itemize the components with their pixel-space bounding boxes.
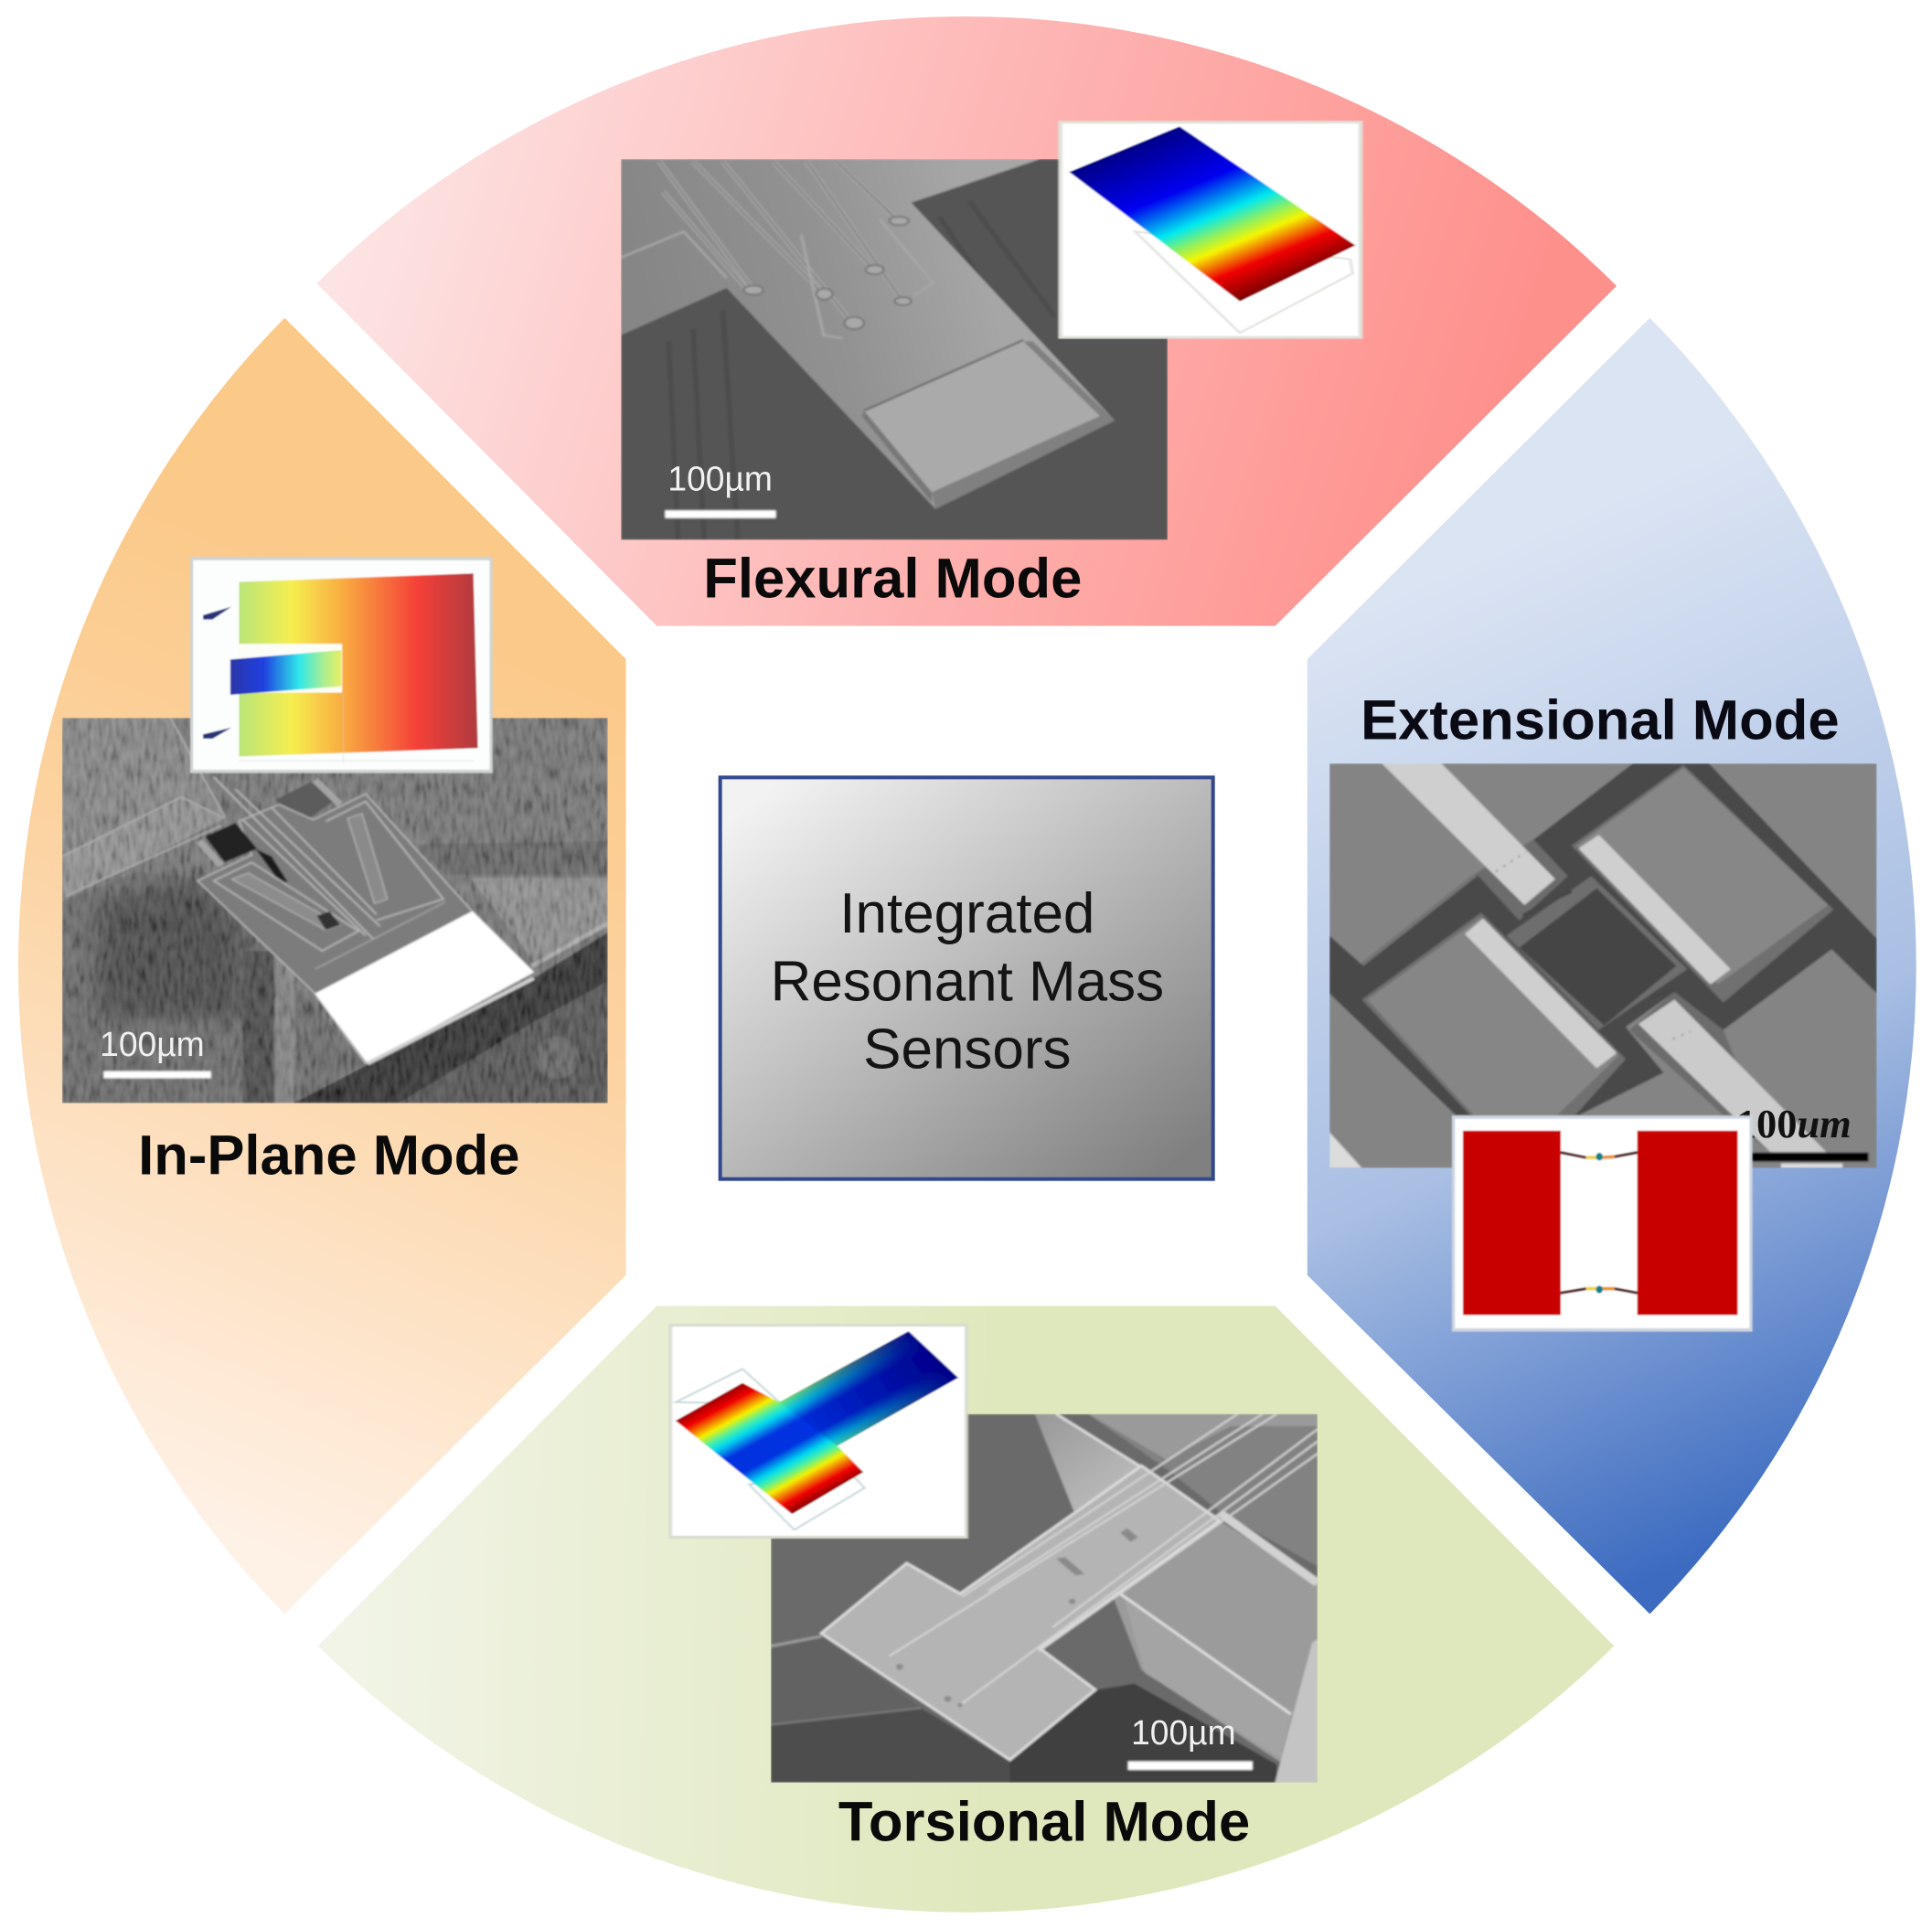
torsional scale label: 100µm xyxy=(1131,1713,1236,1752)
torsional label: Torsional Mode xyxy=(838,1790,1250,1853)
center title: Resonant Mass xyxy=(771,950,1164,1013)
flexural simulation inset xyxy=(1061,123,1361,337)
center title: Sensors xyxy=(863,1018,1072,1081)
in-plane label: In-Plane Mode xyxy=(138,1124,520,1187)
center title: Integrated xyxy=(839,882,1094,945)
panel: torsional mode xyxy=(318,1306,1614,1913)
center box xyxy=(720,777,1213,1179)
torsional SEM micrograph xyxy=(771,1414,1318,1783)
in-plane SEM micrograph xyxy=(62,718,608,1103)
in-plane simulation inset xyxy=(192,559,491,772)
extensional petal xyxy=(1308,318,1916,1614)
center panel xyxy=(720,777,1213,1179)
flexural scale label: 100µm xyxy=(667,459,773,497)
in-plane scale label: 100µm xyxy=(100,1025,205,1063)
extensional label: Extensional Mode xyxy=(1361,689,1840,752)
extensional SEM micrograph xyxy=(1329,763,1877,1168)
extensional simulation inset xyxy=(1454,1117,1751,1330)
torsional petal xyxy=(318,1306,1614,1913)
flexural SEM micrograph xyxy=(621,159,1168,540)
flexural petal xyxy=(316,16,1617,626)
panel: in-plane mode xyxy=(18,318,626,1614)
torsional simulation inset xyxy=(670,1326,966,1537)
extensional scale label: 100um xyxy=(1736,1101,1852,1146)
panel: extensional mode xyxy=(1308,318,1916,1614)
in-plane petal xyxy=(18,318,626,1614)
panel: flexural mode xyxy=(316,16,1617,626)
flexural label: Flexural Mode xyxy=(703,548,1082,611)
